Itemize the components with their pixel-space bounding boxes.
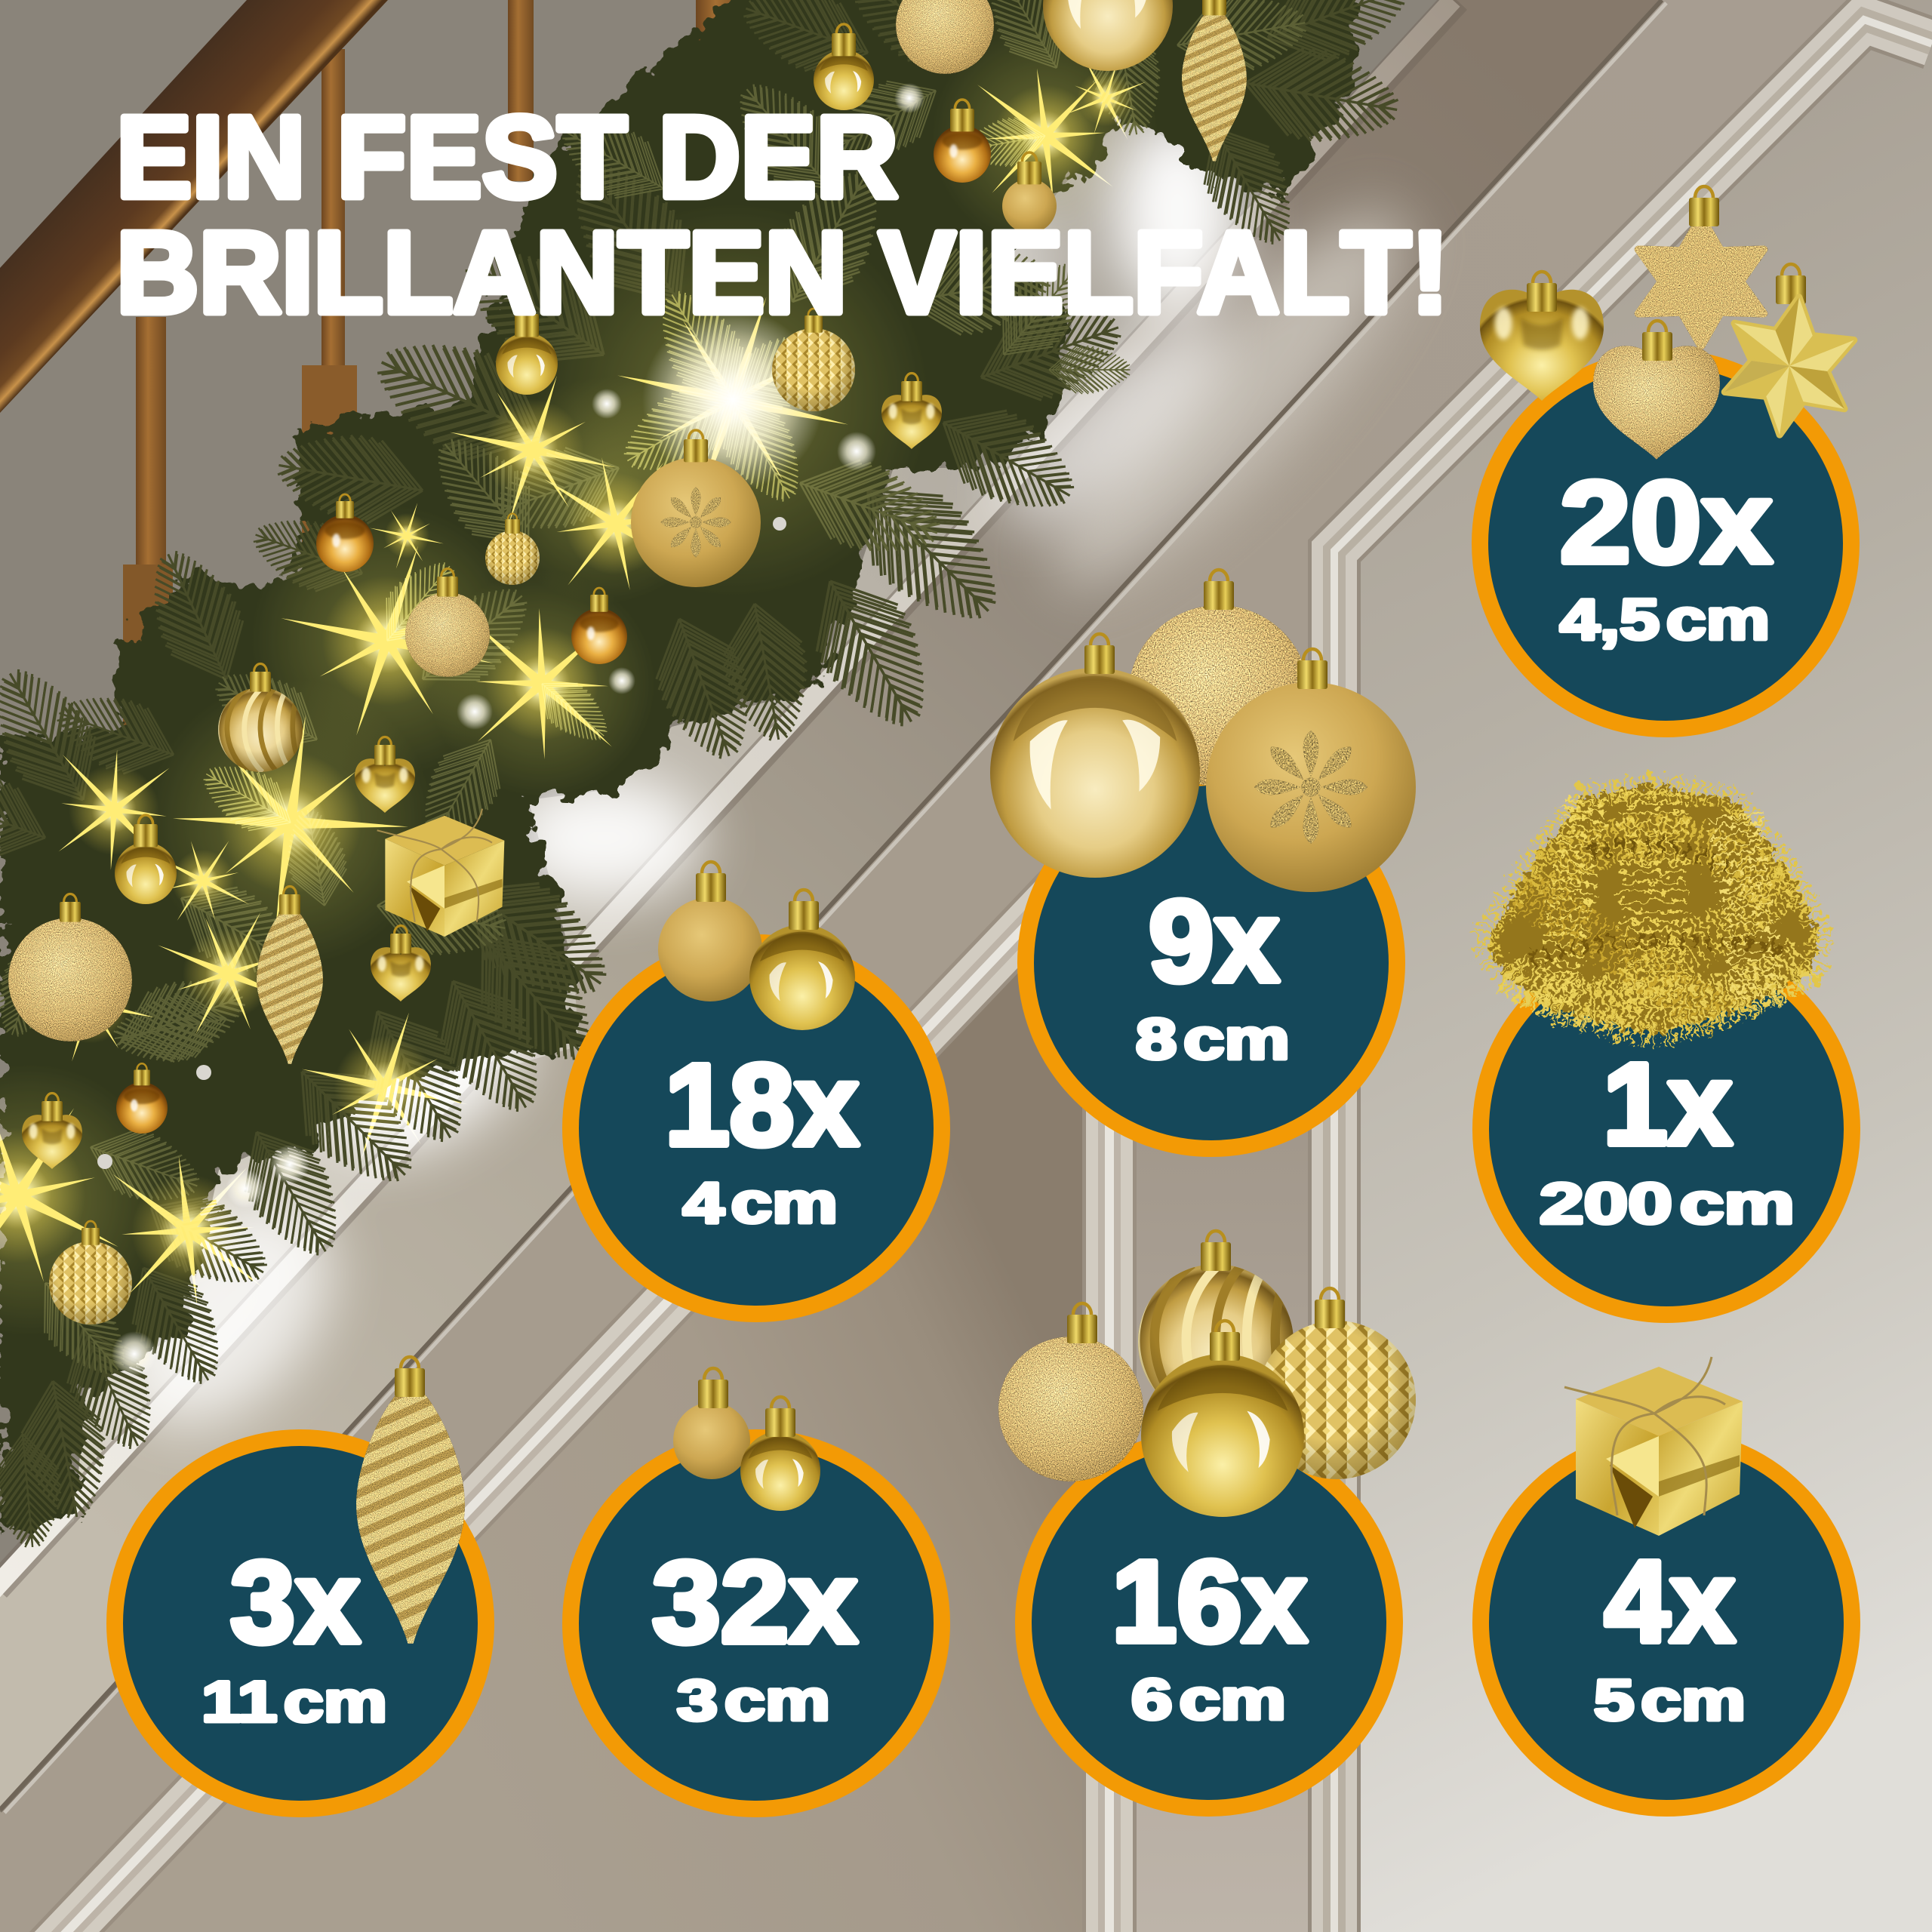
size: 8 cm — [1136, 1008, 1290, 1072]
icon: two baubles — [658, 862, 855, 1030]
quantity: 9x — [1149, 876, 1279, 1006]
size: 4,5 cm — [1560, 588, 1770, 652]
title — [116, 92, 1449, 337]
size: 3 cm — [677, 1669, 830, 1733]
lit stair tread above the molding — [0, 113, 1238, 1583]
size: 11 cm — [202, 1670, 387, 1734]
icon: tinsel — [1481, 785, 1822, 1037]
icon: three large baubles — [990, 570, 1416, 892]
garland: small lights — [112, 83, 924, 1377]
panel: 18x 4 cm — [571, 862, 942, 1314]
quantity: 20x — [1560, 457, 1772, 587]
title: EIN FEST DER — [116, 92, 898, 222]
quantity: 1x — [1603, 1039, 1732, 1169]
icon: two small baubles — [673, 1368, 820, 1511]
quantity: 32x — [652, 1537, 857, 1667]
garland: pine branches — [0, 0, 1420, 1550]
badge — [571, 1438, 942, 1809]
garland: star lights — [0, 23, 1168, 1346]
badge — [1023, 1437, 1395, 1808]
badge — [571, 943, 942, 1314]
panel: 1x 200 cm — [1481, 785, 1852, 1315]
quantity: 3x — [230, 1537, 360, 1667]
size: 6 cm — [1131, 1668, 1286, 1732]
icon: hearts and stars — [1480, 186, 1859, 460]
badge — [1026, 777, 1397, 1149]
quantity: 16x — [1112, 1537, 1307, 1666]
icon: gift box — [1564, 1357, 1743, 1536]
title: BRILLANTEN VIELFALT! — [116, 208, 1449, 337]
panel: 20x 4,5 cm — [1480, 186, 1859, 729]
handrail and balusters — [0, 0, 746, 758]
icon: four baubles — [998, 1231, 1416, 1517]
size: 4 cm — [683, 1171, 838, 1235]
stair light glow — [80, 113, 1251, 1465]
size: 200 cm — [1540, 1172, 1795, 1236]
panel: 3x 11 cm — [115, 1357, 486, 1809]
panel: 16x 6 cm — [998, 1231, 1416, 1808]
badge — [115, 1438, 486, 1809]
badge — [1480, 358, 1851, 729]
panel: 4x 5 cm — [1481, 1357, 1852, 1808]
badge — [1481, 1437, 1852, 1808]
panel: 32x 3 cm — [571, 1368, 942, 1809]
icon: spiral drop ornament — [356, 1357, 465, 1644]
quantity: 4x — [1604, 1537, 1735, 1666]
size: 5 cm — [1594, 1669, 1746, 1733]
badge — [1481, 943, 1852, 1315]
quantity: 18x — [665, 1040, 859, 1170]
wall panel shading — [1011, 171, 1450, 629]
garland: baubles — [8, 0, 1247, 1324]
panel: 9x 8 cm — [990, 570, 1416, 1149]
